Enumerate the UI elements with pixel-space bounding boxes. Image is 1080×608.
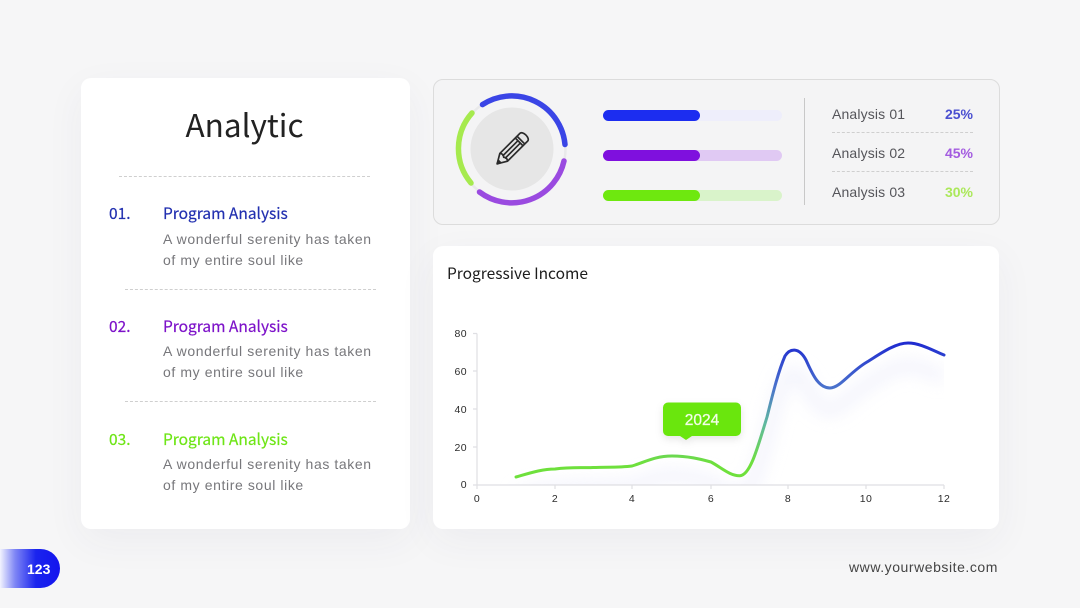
chart heading: Progressive Income: [447, 262, 588, 284]
axis labels: 0: [461, 479, 467, 491]
axis labels: 40: [455, 404, 467, 416]
description 3: [163, 456, 372, 493]
description 1: [163, 231, 372, 268]
description 1: A wonderful serenity has taken: [163, 231, 372, 247]
axis labels: 10: [860, 493, 872, 505]
axis labels: 4: [629, 493, 635, 505]
heading 1: Program Analysis: [163, 202, 288, 224]
number 3: 03.: [109, 428, 131, 450]
number 2: 02.: [109, 315, 131, 337]
axis labels: 12: [938, 493, 950, 505]
item 3: [109, 428, 372, 493]
income curve: [516, 343, 944, 477]
value: 25%: 25%: [945, 106, 973, 122]
panel: analysis summary: [433, 79, 1000, 225]
value: 45%: 45%: [945, 145, 973, 161]
label: analysis 01: Analysis 01: [832, 106, 905, 122]
heading 2: Program Analysis: [163, 315, 288, 337]
tooltip: 2024: [663, 402, 741, 440]
description 1: of my entire soul like: [163, 252, 304, 268]
axis labels: 20: [455, 442, 467, 454]
description 2: of my entire soul like: [163, 364, 304, 380]
axis labels: 0: [474, 493, 480, 505]
label: analysis 03: Analysis 03: [832, 184, 905, 200]
bar 2: [603, 150, 782, 161]
heading 3: Program Analysis: [163, 428, 288, 450]
axis labels: 80: [455, 328, 467, 340]
axis labels: 8: [785, 493, 791, 505]
title: Analytic: [185, 101, 304, 147]
axis labels: [455, 328, 950, 505]
axis labels: 2: [552, 493, 558, 505]
curve shadow: [786, 374, 802, 384]
value: 30%: 30%: [945, 184, 973, 200]
tooltip: 2024: 2024: [685, 412, 720, 429]
page number badge: 123: [27, 561, 50, 577]
icon: donut ring with pencil: [456, 93, 568, 206]
panel: progressive income: [433, 246, 999, 529]
bar 3: [603, 190, 782, 201]
description 2: [163, 343, 372, 380]
axis labels: 6: [708, 493, 714, 505]
description 3: A wonderful serenity has taken: [163, 456, 372, 472]
description 3: of my entire soul like: [163, 477, 304, 493]
page number badge: [0, 549, 60, 588]
bar 1: [603, 110, 782, 121]
line chart: [454, 328, 950, 505]
label: analysis 02: Analysis 02: [832, 145, 905, 161]
website url: www.yourwebsite.com: [849, 559, 998, 575]
panel: program list: [81, 78, 410, 529]
description 2: A wonderful serenity has taken: [163, 343, 372, 359]
number 1: 01.: [109, 202, 131, 224]
item 2: [109, 315, 372, 380]
item 1: [109, 202, 372, 268]
axes: [473, 334, 944, 489]
axis labels: 60: [455, 366, 467, 378]
